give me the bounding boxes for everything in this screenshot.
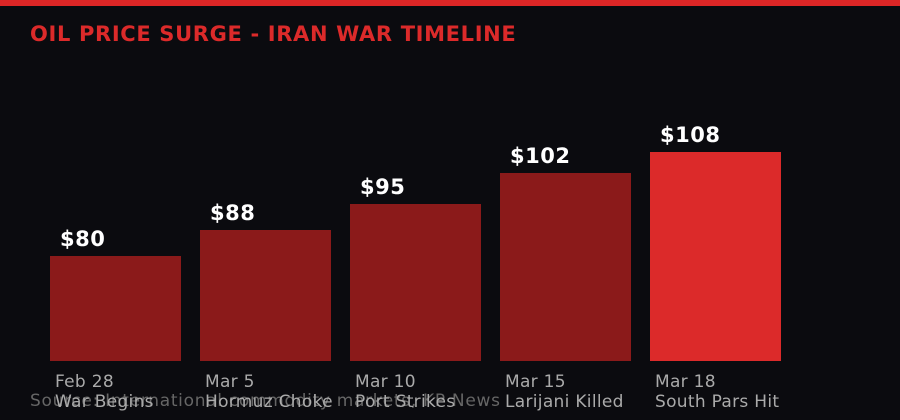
bar: Mar 15: Mar 15 bbox=[505, 372, 566, 392]
bar: Feb 28: Feb 28 bbox=[55, 372, 114, 392]
source: Source: International commodity markets, KP News bbox=[30, 391, 501, 411]
bar: Mar 15: $102 bbox=[510, 144, 570, 168]
bar: Feb 28 bbox=[50, 227, 181, 412]
bar: Mar 10: Mar 10 bbox=[355, 372, 416, 392]
bar: Mar 10: $95 bbox=[360, 175, 405, 199]
title: OIL PRICE SURGE - IRAN WAR TIMELINE bbox=[30, 22, 516, 46]
bar: Mar 15 bbox=[500, 144, 631, 412]
top accent bar bbox=[0, 0, 900, 6]
bar: Mar 18 bbox=[650, 123, 781, 412]
bar: Mar 5: Hormuz Choke bbox=[205, 392, 333, 412]
bar: Feb 28: $80 bbox=[60, 227, 105, 251]
bar: Mar 18: South Pars Hit bbox=[655, 392, 779, 412]
bar: Mar 5: Mar 5 bbox=[205, 372, 255, 392]
bar: Mar 10 bbox=[350, 175, 481, 412]
bar: Mar 5: $88 bbox=[210, 201, 255, 225]
bar: Mar 15: Larijani Killed bbox=[505, 392, 624, 412]
bar: Mar 5 bbox=[200, 201, 333, 412]
bar: Mar 18: Mar 18 bbox=[655, 372, 716, 392]
bar: Mar 18: $108 bbox=[660, 123, 720, 147]
bar chart bbox=[50, 123, 781, 412]
bar: Mar 10: Port Strikes bbox=[355, 392, 455, 412]
bar: Feb 28: War Begins bbox=[55, 392, 154, 412]
